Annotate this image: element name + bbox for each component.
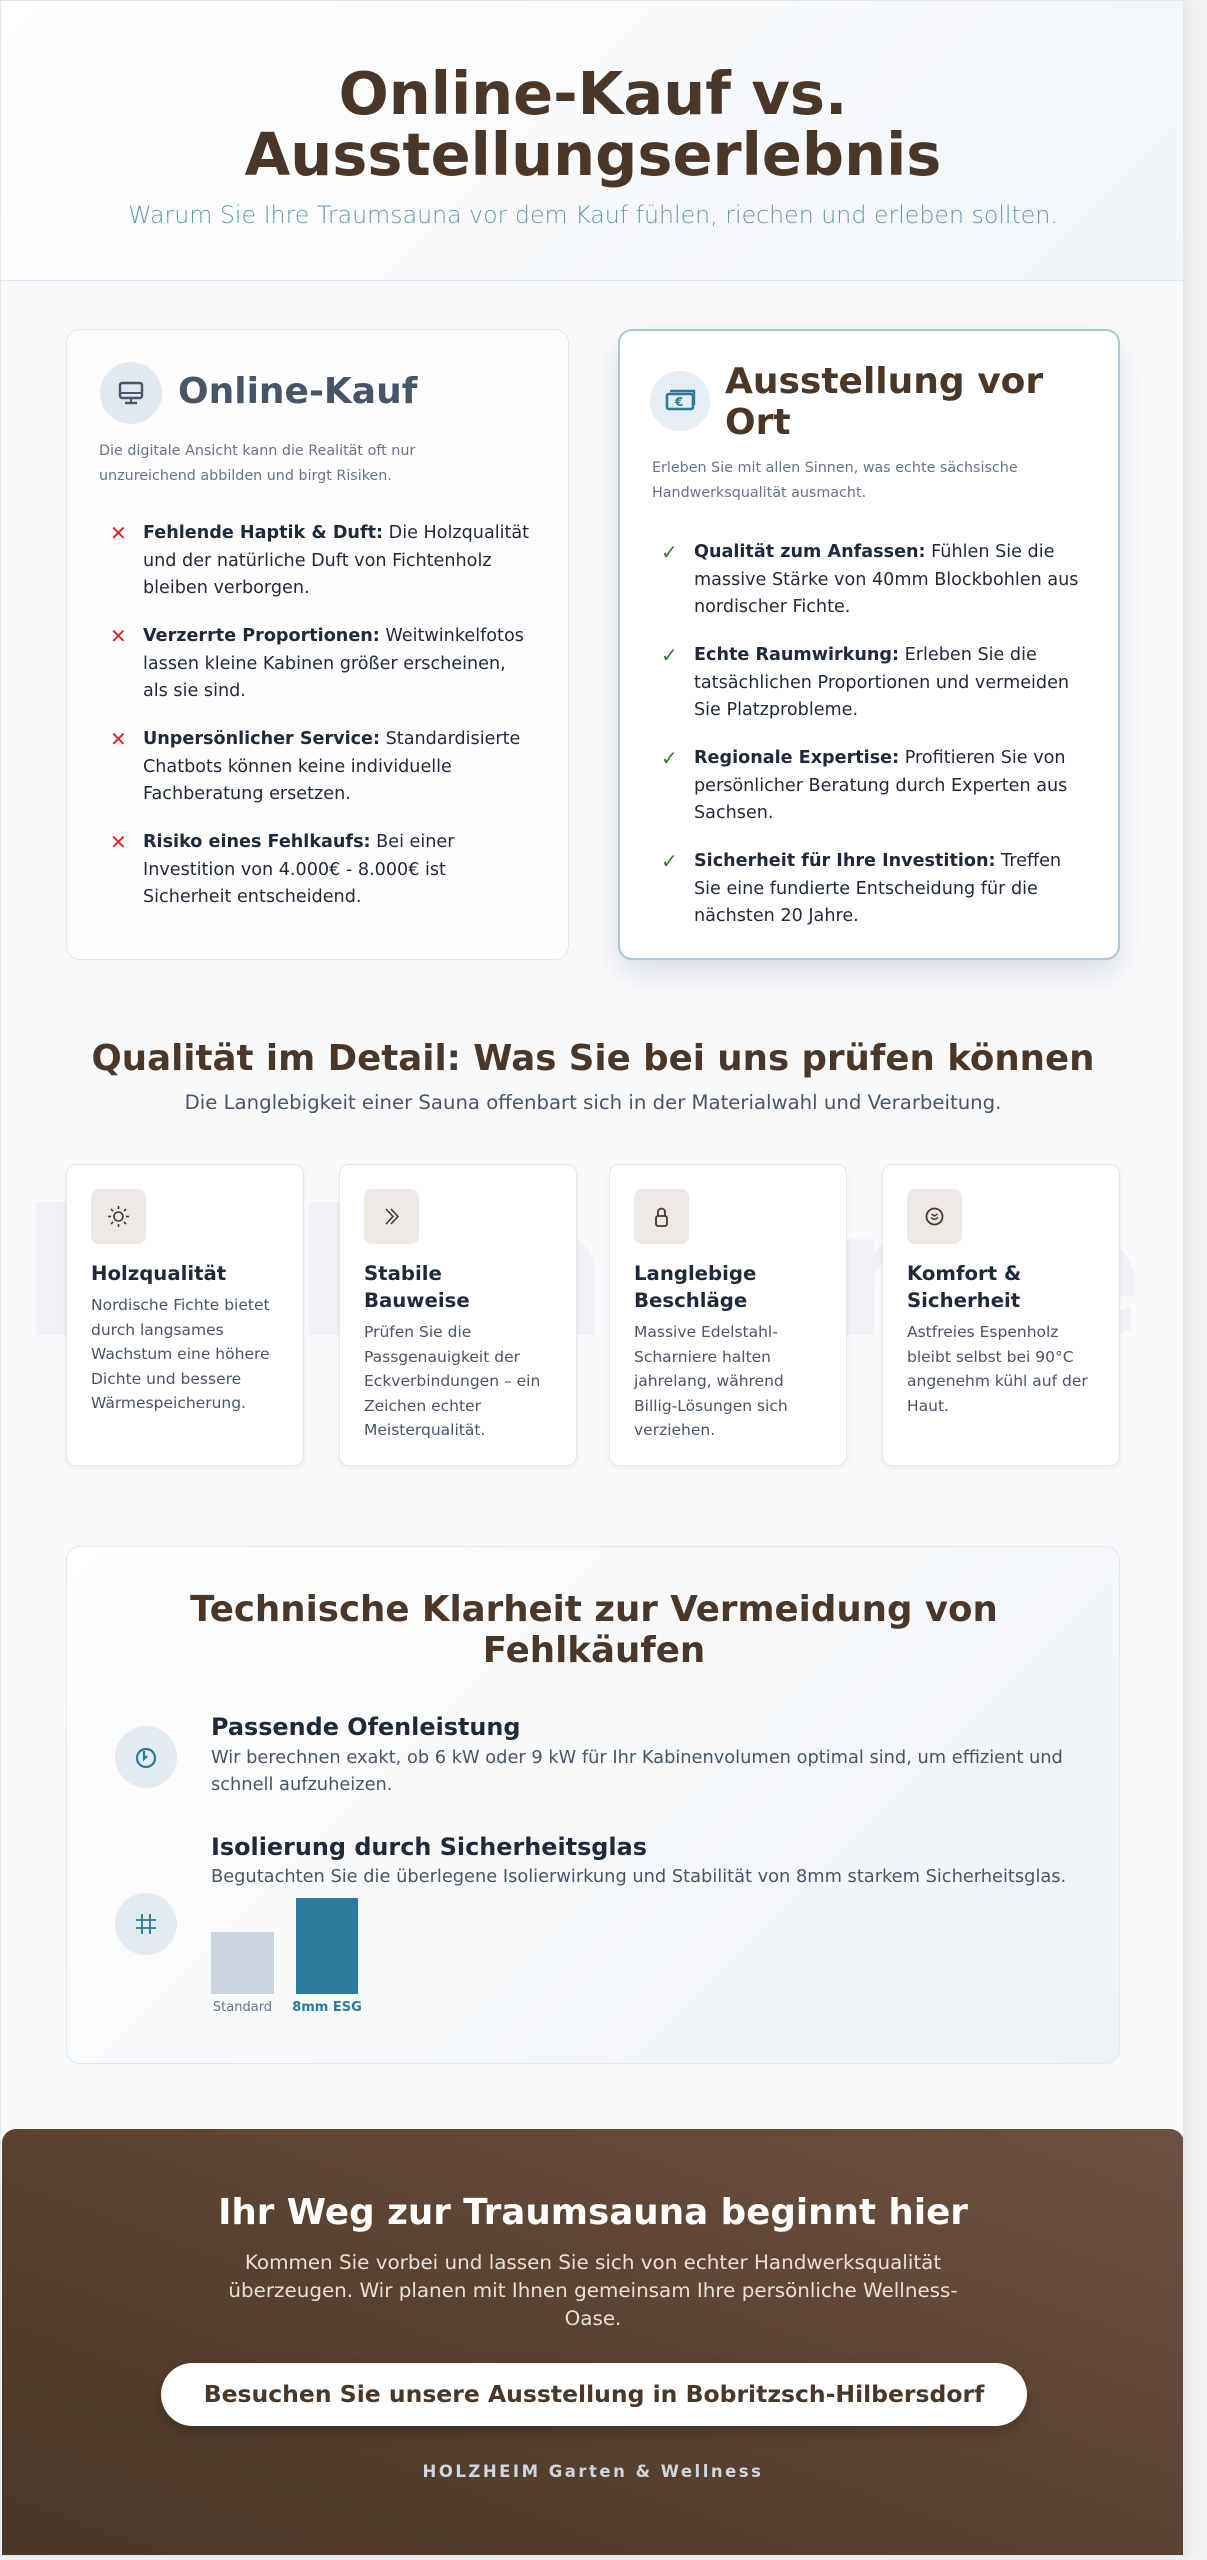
card: holzqualität — [66, 1164, 304, 1466]
panel: ausstellung — [618, 329, 1120, 960]
card: beschläge — [609, 1164, 847, 1466]
heading: Online-Kauf — [178, 371, 417, 412]
item: sicherheitsglas: Begutachten Sie die überlegene Isolierwirkung und Stabilität von 8mm starkem Sicherheitsglas. — [211, 1866, 1066, 1887]
list: benefits: Sicherheit für Ihre Investition: Treffen Sie eine fundierte Entscheidung für die nächsten 20 Jahre. — [694, 851, 1061, 926]
card: beschläge: Langlebige Beschläge — [634, 1262, 756, 1312]
icon: power — [115, 1726, 177, 1788]
cta button — [161, 2363, 1027, 2426]
list: risks: Risiko eines Fehlkaufs: Bei einer Investition von 4.000€ - 8.000€ ist Sicherheit entscheidend. — [143, 832, 454, 907]
panel: online-kauf: ✕ — [110, 624, 127, 648]
list: risks: Verzerrte Proportionen: Weitwinkelfotos lassen kleine Kabinen größer erscheinen, als sie sind. — [143, 626, 524, 701]
card: stabile bauweise — [339, 1164, 577, 1466]
list: benefits: Qualität zum Anfassen: Fühlen Sie die massive Stärke von 40mm Blockbohlen aus nordischer Fichte. — [694, 542, 1078, 617]
list: benefits: Regionale Expertise: Profitieren Sie von persönlicher Beratung durch Experten aus Sachsen. — [694, 748, 1067, 823]
description: Erleben Sie mit allen Sinnen, was echte sächsische Handwerksqualität ausmacht. — [652, 460, 1018, 501]
panel: online-kauf: ✕ — [110, 830, 127, 854]
item: ofenleistung: Passende Ofenleistung — [211, 1713, 521, 1741]
heading: Ausstellung vor Ort — [725, 361, 1043, 443]
card: stabile bauweise: Prüfen Sie die Passgenauigkeit der Eckverbindungen – ein Zeichen echter Meisterqualität. — [364, 1323, 540, 1439]
section subtitle: Die Langlebigkeit einer Sauna offenbart sich in der Materialwahl und Verarbeitung. — [185, 1091, 1001, 1114]
panel: online-kauf — [66, 329, 569, 960]
bar chart: Standard — [213, 2000, 272, 2015]
icon: money — [650, 371, 710, 431]
footer brand: HOLZHEIM Garten & Wellness — [423, 2462, 763, 2481]
card: beschläge: Massive Edelstahl-Scharniere halten jahrelang, während Billig-Lösungen sich verziehen. — [634, 1323, 788, 1439]
cta heading: Ihr Weg zur Traumsauna beginnt hier — [218, 2192, 968, 2233]
list: risks — [110, 521, 529, 907]
icon: smile — [907, 1189, 962, 1244]
title: Ausstellungserlebnis — [245, 120, 941, 189]
icon: chevrons — [364, 1189, 419, 1244]
panel: ausstellung: ✓ — [661, 643, 678, 667]
cta button: Besuchen Sie unsere Ausstellung in Bobritzsch-Hilbersdorf — [204, 2380, 984, 2408]
card: komfort: Astfreies Espenholz bleibt selbst bei 90°C angenehm kühl auf der Haut. — [907, 1323, 1088, 1414]
card: holzqualität: Nordische Fichte bietet durch langsames Wachstum eine höhere Dichte und bessere Wärmespeicherung. — [91, 1296, 270, 1412]
title: Online-Kauf vs. — [339, 59, 847, 128]
cta text: Kommen Sie vorbei und lassen Sie sich von echter Handwerksqualität überzeugen. Wir planen mit Ihnen gemeinsam Ihre persönliche Wellness-Oase. — [228, 2251, 958, 2330]
list: benefits: Echte Raumwirkung: Erleben Sie die tatsächlichen Proportionen und vermeiden Sie Platzprobleme. — [694, 645, 1069, 720]
card: stabile bauweise: Stabile Bauweise — [364, 1262, 470, 1312]
heading: Technische Klarheit zur Vermeidung von Fehlkäufen — [190, 1589, 998, 1671]
panel: ausstellung: ✓ — [661, 849, 678, 873]
card: komfort — [882, 1164, 1120, 1466]
bar chart — [211, 1898, 362, 2015]
card: holzqualität: Holzqualität — [91, 1262, 226, 1285]
item: ofenleistung — [115, 1713, 1063, 1795]
icon: lock — [634, 1189, 689, 1244]
panel: online-kauf: ✕ — [110, 727, 127, 751]
header — [1, 1, 1185, 281]
icon: sun — [91, 1189, 146, 1244]
list: benefits — [661, 540, 1078, 926]
icon: grid — [115, 1893, 177, 1955]
icon: monitor — [100, 362, 162, 424]
panel: technische klarheit — [66, 1546, 1120, 2064]
item: ofenleistung: Wir berechnen exakt, ob 6 kW oder 9 kW für Ihr Kabinenvolumen optimal sind, um effizient und schnell aufzuheizen. — [211, 1747, 1063, 1795]
card: komfort: Komfort & Sicherheit — [907, 1262, 1021, 1312]
item: sicherheitsglas: Isolierung durch Sicherheitsglas — [211, 1833, 647, 1861]
panel: ausstellung: ✓ — [661, 746, 678, 770]
list: risks: Fehlende Haptik & Duft: Die Holzqualität und der natürliche Duft von Fichtenholz bleiben verborgen. — [143, 523, 529, 598]
bar chart: 8mm ESG — [292, 2000, 362, 2015]
watermark: holzheime — [21, 1174, 1158, 1377]
panel: online-kauf: ✕ — [110, 521, 127, 545]
list: risks: Unpersönlicher Service: Standardisierte Chatbots können keine individuelle Fachberatung ersetzen. — [143, 729, 520, 804]
title — [245, 59, 941, 189]
cta — [2, 2129, 1184, 2557]
subtitle: Warum Sie Ihre Traumsauna vor dem Kauf fühlen, riechen und erleben sollten. — [128, 201, 1058, 229]
item: sicherheitsglas — [115, 1833, 1066, 2015]
description: Die digitale Ansicht kann die Realität oft nur unzureichend abbilden und birgt Risiken. — [99, 443, 415, 484]
icon: money: € — [674, 395, 683, 409]
section heading: qualität: Qualität im Detail: Was Sie bei uns prüfen können — [92, 1038, 1094, 1079]
panel: ausstellung: ✓ — [661, 540, 678, 564]
